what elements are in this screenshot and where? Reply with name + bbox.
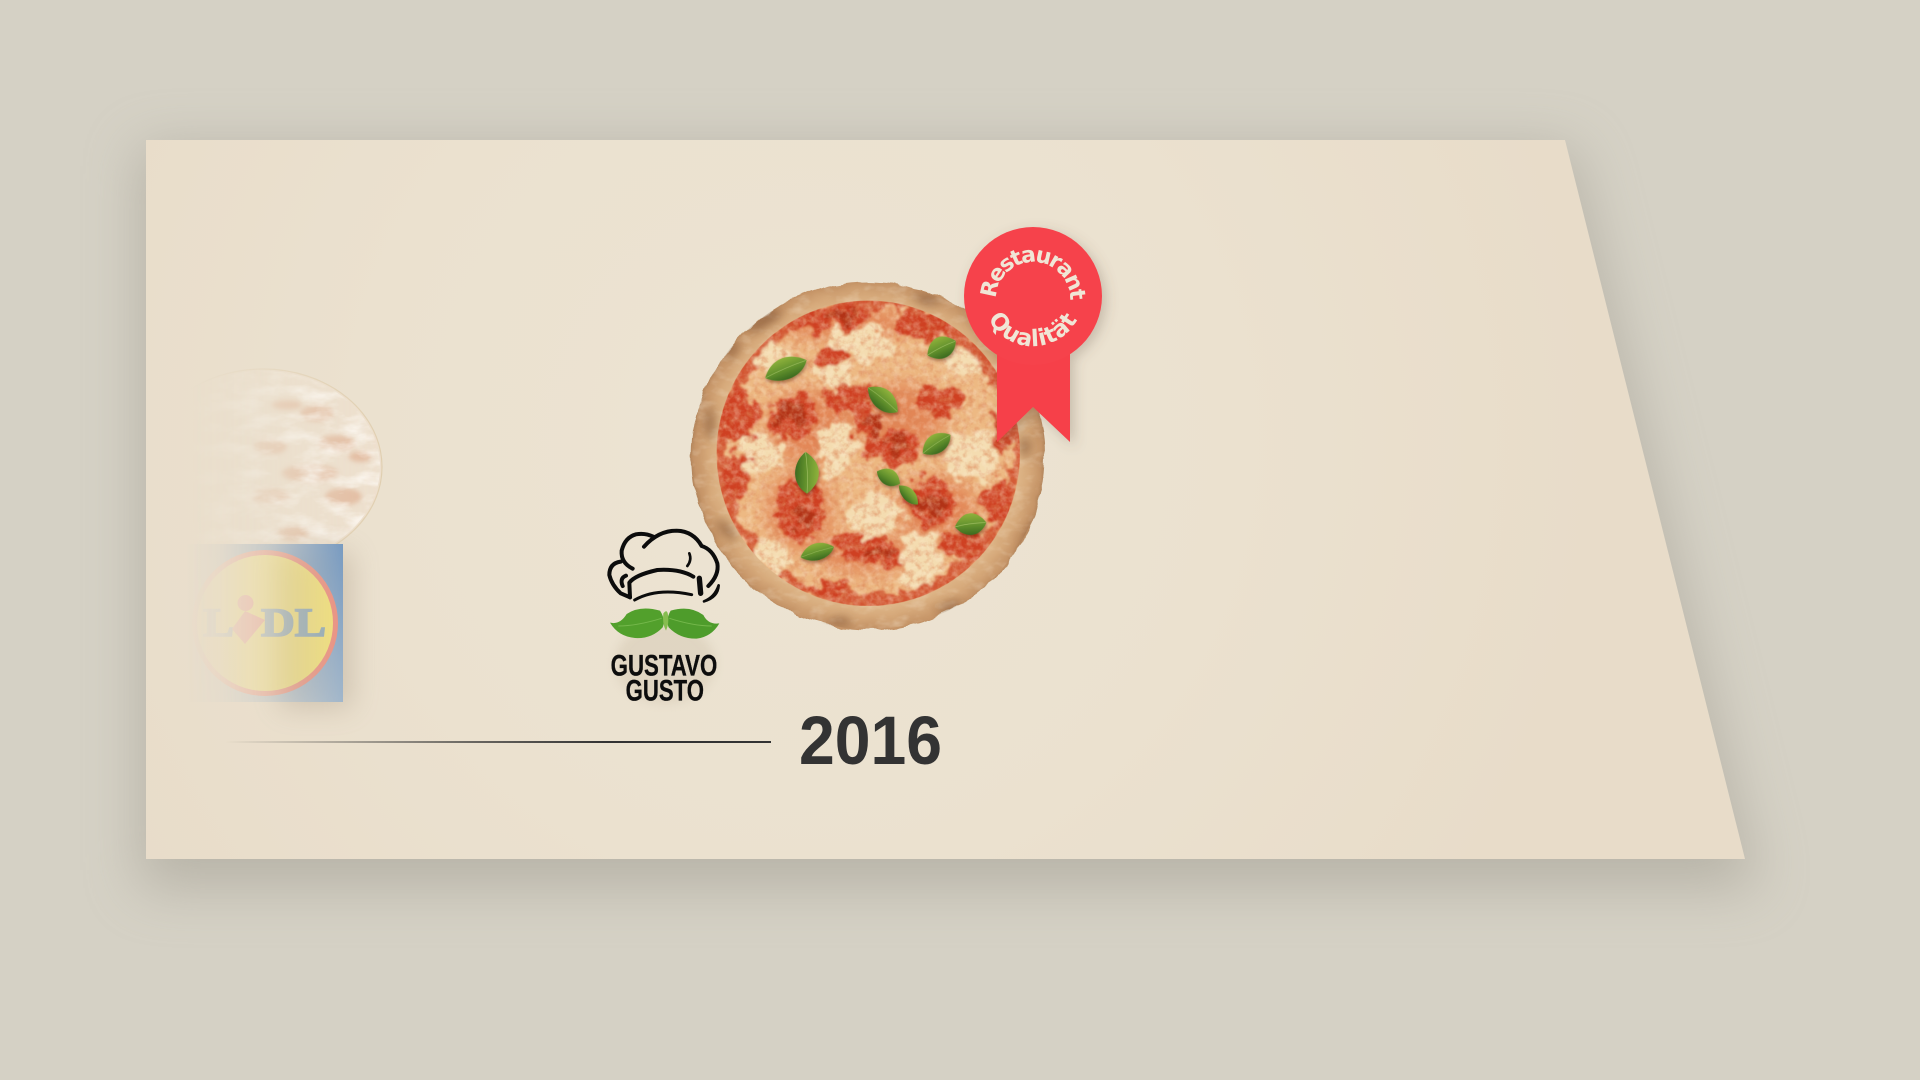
image: faded dough pizza (248, 368, 382, 544)
brand name: GUSTO (626, 674, 704, 707)
badge text: Restaurant (980, 250, 1086, 300)
pizza crust (692, 282, 1045, 630)
Lidl logo shadow (280, 552, 352, 708)
logo ring (223, 550, 338, 696)
badge text (980, 250, 1086, 346)
icon: basil moustache (610, 608, 719, 639)
timeline line (225, 741, 771, 743)
logo soft shadow (615, 623, 715, 703)
badge ribbon and seal (964, 227, 1102, 442)
panel: timeline card (146, 140, 1745, 859)
logo tile (221, 544, 343, 702)
logo wordmark: L (203, 600, 234, 645)
pizza cheese and sauce (715, 300, 1022, 607)
basil leaves (761, 332, 987, 564)
badge text: Qualität (991, 313, 1078, 346)
panel shadow (140, 148, 1758, 888)
brand name: GUSTAVO (611, 650, 717, 683)
logo: Gustavo Gusto (609, 531, 719, 707)
badge: restaurant quality (963, 226, 1111, 444)
basil leaf (761, 332, 987, 564)
logo wordmark: DL (261, 600, 326, 645)
crust texture and char marks (692, 282, 1045, 630)
year label: 2016 (799, 702, 942, 779)
brand name (611, 650, 717, 707)
image: margherita pizza (692, 282, 1045, 630)
logo i mark (232, 595, 265, 644)
icon: chef hat (609, 531, 719, 601)
logo: Lidl (220, 544, 343, 702)
logo wordmark (220, 608, 325, 637)
logo disc (224, 555, 333, 691)
